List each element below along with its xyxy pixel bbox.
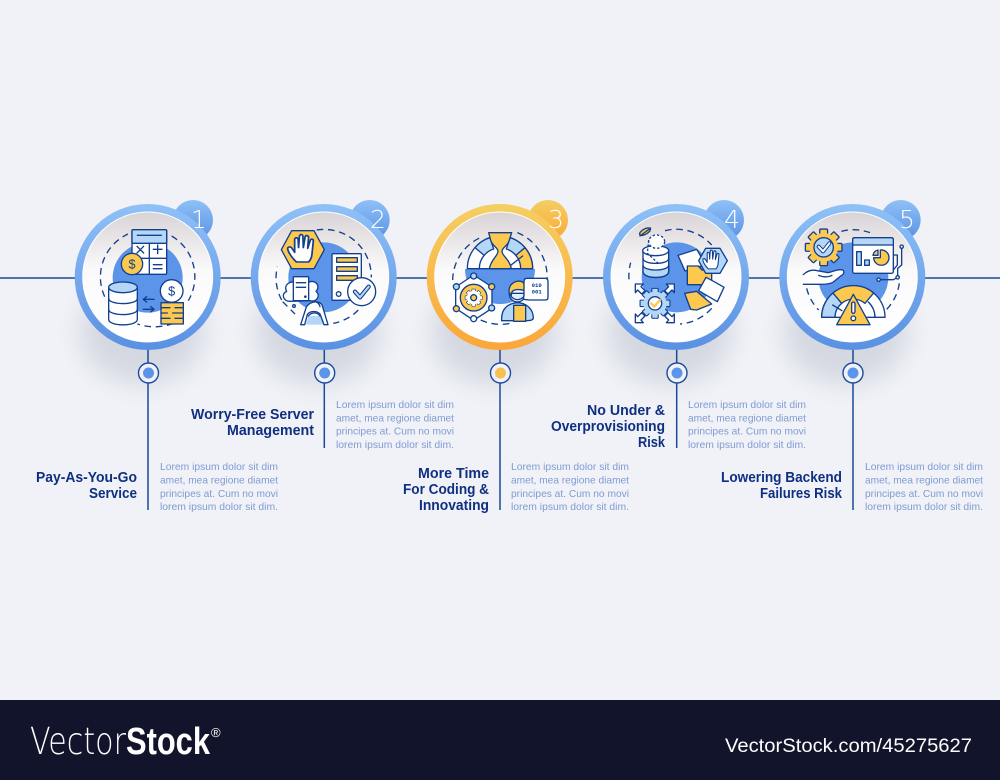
title 2: Worry-Free Server xyxy=(191,407,314,423)
text 2: principes at. Cum no movi xyxy=(336,426,454,438)
title 4: Risk xyxy=(638,435,666,451)
title 3 xyxy=(403,466,489,514)
text 2 xyxy=(336,399,454,451)
badge 2 xyxy=(350,200,390,240)
connector node 4 xyxy=(667,363,687,383)
icon: hourglass gauge, gear network, developer: 001 xyxy=(532,288,542,295)
footer logo: Vector xyxy=(30,720,127,763)
text 5: lorem ipsum dolor sit dim. xyxy=(865,501,983,513)
connector node 3 xyxy=(490,363,510,383)
text 4: amet, mea regione diamet xyxy=(688,412,806,424)
connector node 2 xyxy=(315,363,335,383)
text 4: lorem ipsum dolor sit dim. xyxy=(688,439,806,451)
text 4: principes at. Cum no movi xyxy=(688,426,806,438)
title 4 xyxy=(551,403,666,451)
badge 3 xyxy=(528,200,568,240)
text 4: Lorem ipsum dolor sit dim xyxy=(688,399,806,411)
title 2 xyxy=(191,407,314,439)
ring 2 xyxy=(251,204,397,350)
text 4 xyxy=(688,399,806,451)
footer bar xyxy=(0,700,1000,780)
icon: hourglass gauge, gear network, developer: 010 xyxy=(532,282,542,289)
title 1 xyxy=(36,470,137,502)
title 3: More Time xyxy=(418,466,489,482)
icon: calculator, coins and database: $ xyxy=(128,258,136,272)
ring 1 xyxy=(75,204,221,350)
text 5: Lorem ipsum dolor sit dim xyxy=(865,461,983,473)
title 4: Overprovisioning xyxy=(551,419,665,435)
footer id: VectorStock.com/45275627 xyxy=(725,736,972,757)
title 3: For Coding & xyxy=(403,482,489,498)
step 1 xyxy=(36,200,278,513)
text 5 xyxy=(865,461,983,513)
footer logo: Stock xyxy=(126,721,211,763)
icon: stop hand and server xyxy=(276,229,376,325)
footer logo xyxy=(30,720,221,763)
title 5 xyxy=(721,470,843,502)
text 1: lorem ipsum dolor sit dim. xyxy=(160,501,278,513)
title 5: Lowering Backend xyxy=(721,470,842,486)
text 3: Lorem ipsum dolor sit dim xyxy=(511,461,629,473)
number 2: 2 xyxy=(370,205,386,234)
icon: hourglass gauge, gear network, developer xyxy=(453,233,548,324)
ring 5 xyxy=(779,204,925,350)
text 3: principes at. Cum no movi xyxy=(511,488,629,500)
text 5: principes at. Cum no movi xyxy=(865,488,983,500)
title 1: Service xyxy=(89,486,137,502)
text 3: lorem ipsum dolor sit dim. xyxy=(511,501,629,513)
number 1: 1 xyxy=(191,205,207,234)
badge 4 xyxy=(704,200,744,240)
badge 5 xyxy=(881,200,921,240)
badge 1 xyxy=(173,200,213,240)
text 2: Lorem ipsum dolor sit dim xyxy=(336,399,454,411)
title 4: No Under & xyxy=(587,403,666,419)
step 5 xyxy=(721,200,983,513)
title 5: Failures Risk xyxy=(760,486,843,502)
connector node 1 xyxy=(138,363,158,383)
number 4: 4 xyxy=(724,205,740,234)
text 1: amet, mea regione diamet xyxy=(160,474,278,486)
step 3 xyxy=(403,200,629,514)
icon: database, gear with arrows, folders xyxy=(629,226,727,324)
horizontal timeline line xyxy=(0,277,1000,279)
number 5: 5 xyxy=(899,205,915,234)
title 3: Innovating xyxy=(419,498,489,514)
text 1 xyxy=(160,461,278,513)
footer logo: ® xyxy=(211,725,221,740)
text 1: Lorem ipsum dolor sit dim xyxy=(160,461,278,473)
icon: calculator, coins and database xyxy=(100,230,195,327)
title 2: Management xyxy=(227,423,314,439)
text 2: amet, mea regione diamet xyxy=(336,412,454,424)
text 5: amet, mea regione diamet xyxy=(865,474,983,486)
text 3 xyxy=(511,461,629,513)
ring 4 xyxy=(603,204,749,350)
text 2: lorem ipsum dolor sit dim. xyxy=(336,439,454,451)
text 1: principes at. Cum no movi xyxy=(160,488,278,500)
icon: gear, dashboard, hand, warning gauge xyxy=(803,229,903,325)
title 1: Pay-As-You-Go xyxy=(36,470,137,486)
text 3: amet, mea regione diamet xyxy=(511,474,629,486)
number 3: 3 xyxy=(548,205,564,234)
step 4 xyxy=(551,200,806,451)
icon: calculator, coins and database: $ xyxy=(168,285,175,299)
step 2 xyxy=(191,200,454,451)
ring 3 xyxy=(427,204,573,350)
connector node 5 xyxy=(843,363,863,383)
